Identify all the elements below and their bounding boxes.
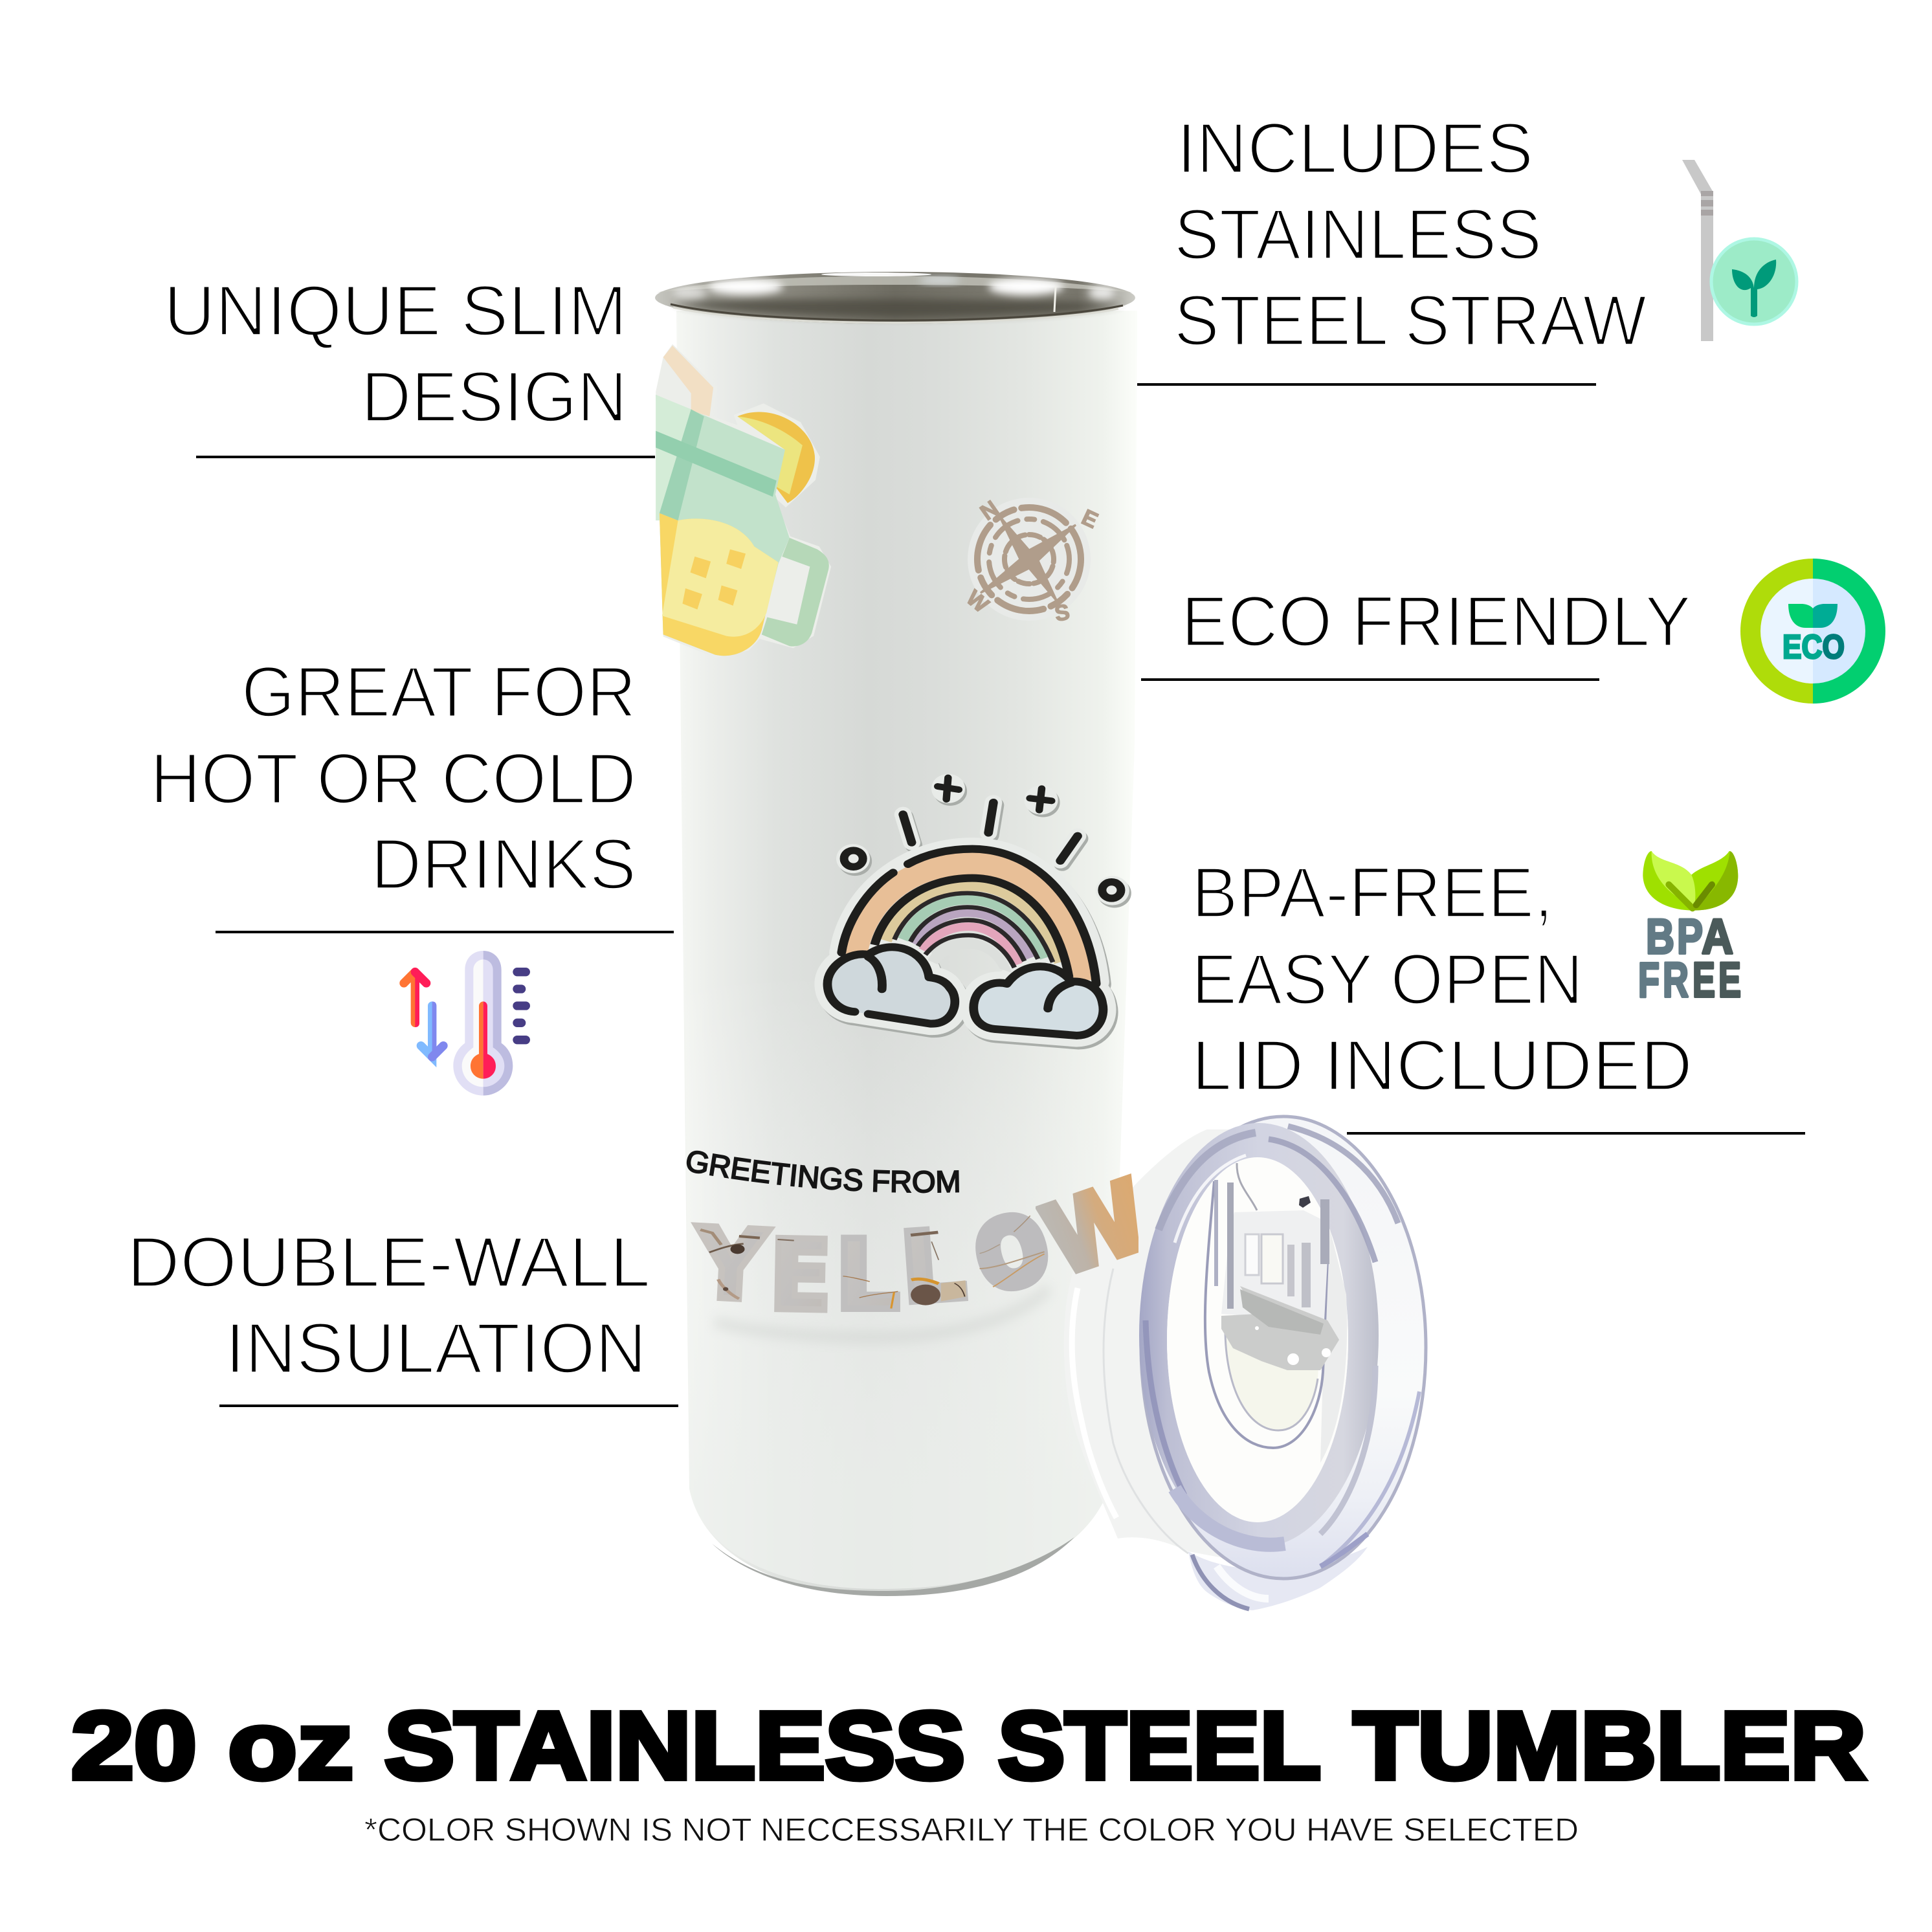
sipping opening xyxy=(1205,1181,1347,1463)
rainbow sticker shadow and border xyxy=(827,788,1115,1038)
tumbler xyxy=(655,272,1137,1596)
callout: includes stainless steel straw: STAINLESS xyxy=(1174,195,1542,274)
title: 20 oz xyxy=(71,1693,353,1799)
base shadow xyxy=(712,1537,1074,1596)
compass star xyxy=(981,516,1076,601)
sticker text: yellow: L xyxy=(896,1208,969,1326)
marble veins on yellow xyxy=(700,1216,1045,1309)
sticker: compass xyxy=(962,493,1102,627)
compass letters: S xyxy=(1053,599,1072,627)
title: STAINLESS xyxy=(384,1693,965,1799)
jar bands xyxy=(660,409,704,520)
compass letters: N xyxy=(976,496,1003,526)
icon: bpa free: E xyxy=(1718,953,1741,1008)
sticker: rainbow xyxy=(827,778,1121,1038)
callout: bpa-free easy open lid included: LID INCLUDED xyxy=(1192,1026,1693,1105)
icon: steel straw with sprout xyxy=(1682,160,1797,341)
lemonade pulp squares xyxy=(682,550,746,610)
disclaimer note: *COLOR SHOWN IS NOT NECCESSARILY THE COLOR YOU HAVE SELECTED xyxy=(364,1812,1579,1848)
callout: double-wall insulation: DOUBLE-WALL xyxy=(127,1223,650,1302)
right cloud xyxy=(973,966,1103,1036)
callout: unique slim design xyxy=(164,271,655,458)
sticker text: yellow: W xyxy=(1030,1159,1162,1298)
lemon xyxy=(737,412,815,503)
callout: eco friendly: ECO FRIENDLY xyxy=(1181,582,1691,661)
lemonade xyxy=(660,513,779,656)
icon: eco badge: ECO xyxy=(1782,628,1845,666)
compass letters: W xyxy=(962,586,994,618)
sticker text: yellow xyxy=(691,1173,1138,1313)
left cloud xyxy=(827,947,1103,1036)
callout: unique slim design: DESIGN xyxy=(361,357,627,437)
callout: great for hot or cold drinks: HOT OR COLD xyxy=(150,739,636,819)
callout: great for hot or cold drinks: GREAT FOR xyxy=(241,652,636,732)
callout: bpa-free easy open lid included: EASY OPEN xyxy=(1192,940,1583,1019)
slide tab xyxy=(1214,1163,1339,1370)
lid skirt inner lines xyxy=(1104,1269,1188,1553)
icon: bpa free xyxy=(1638,851,1741,1008)
lid spout xyxy=(1188,1547,1368,1610)
icon: bpa free: E xyxy=(1693,953,1715,1008)
callout: unique slim design: UNIQUE SLIM xyxy=(164,271,627,351)
icon: bpa free: F xyxy=(1638,953,1660,1008)
compass letters: E xyxy=(1078,505,1102,533)
lid well xyxy=(1167,1157,1348,1522)
lid ring shading xyxy=(1146,1126,1419,1609)
jar glass xyxy=(656,395,790,656)
steel rim and interior xyxy=(655,272,1135,324)
icon: bpa free: R xyxy=(1663,953,1689,1008)
tumbler body xyxy=(676,311,1137,1595)
icon: eco badge xyxy=(1740,559,1885,704)
callout: double-wall insulation: INSULATION xyxy=(225,1309,647,1388)
callout: includes stainless steel straw xyxy=(1137,109,1647,386)
callout: great for hot or cold drinks xyxy=(150,652,674,933)
title xyxy=(71,1693,1866,1799)
lid lavender ring xyxy=(1139,1123,1379,1548)
sticker shadow under yellow xyxy=(715,1288,1049,1337)
callout: bpa-free easy open lid included: BPA-FREE, xyxy=(1192,853,1553,933)
clear tumbler lid xyxy=(1072,1116,1426,1610)
sticker text: yellow: E xyxy=(768,1219,832,1333)
sticker text: yellow: O xyxy=(965,1194,1060,1314)
sticker: lemonade jar xyxy=(656,344,831,658)
callout: includes stainless steel straw: STEEL STRAW xyxy=(1174,281,1647,361)
lid skirt xyxy=(1064,1129,1269,1566)
callout: includes stainless steel straw: INCLUDES xyxy=(1177,109,1533,188)
callout: double-wall insulation xyxy=(127,1223,678,1407)
title: TUMBLER xyxy=(1353,1693,1866,1799)
rainbow sparkle marks xyxy=(844,778,1121,898)
compass letters xyxy=(962,496,1102,627)
sticker text: greetings from: GREETINGS FROM xyxy=(686,1151,959,1194)
icon: bpa free: A xyxy=(1702,909,1733,964)
handle xyxy=(762,538,829,647)
callout: bpa-free easy open lid included xyxy=(1192,853,1805,1135)
icon: thermometer with arrows xyxy=(404,951,526,1096)
callout: great for hot or cold drinks: DRINKS xyxy=(371,825,636,904)
icon: bpa free: B xyxy=(1646,909,1674,964)
straw xyxy=(663,346,713,416)
body lower highlight xyxy=(685,971,1126,1589)
lid outer ring xyxy=(1141,1116,1426,1579)
rainbow bands xyxy=(841,849,1096,984)
title: STEEL xyxy=(998,1693,1321,1799)
sticker text: yellow: Y xyxy=(691,1207,771,1324)
icon: bpa free: P xyxy=(1677,909,1703,964)
sticker text: yellow: L xyxy=(835,1219,900,1332)
